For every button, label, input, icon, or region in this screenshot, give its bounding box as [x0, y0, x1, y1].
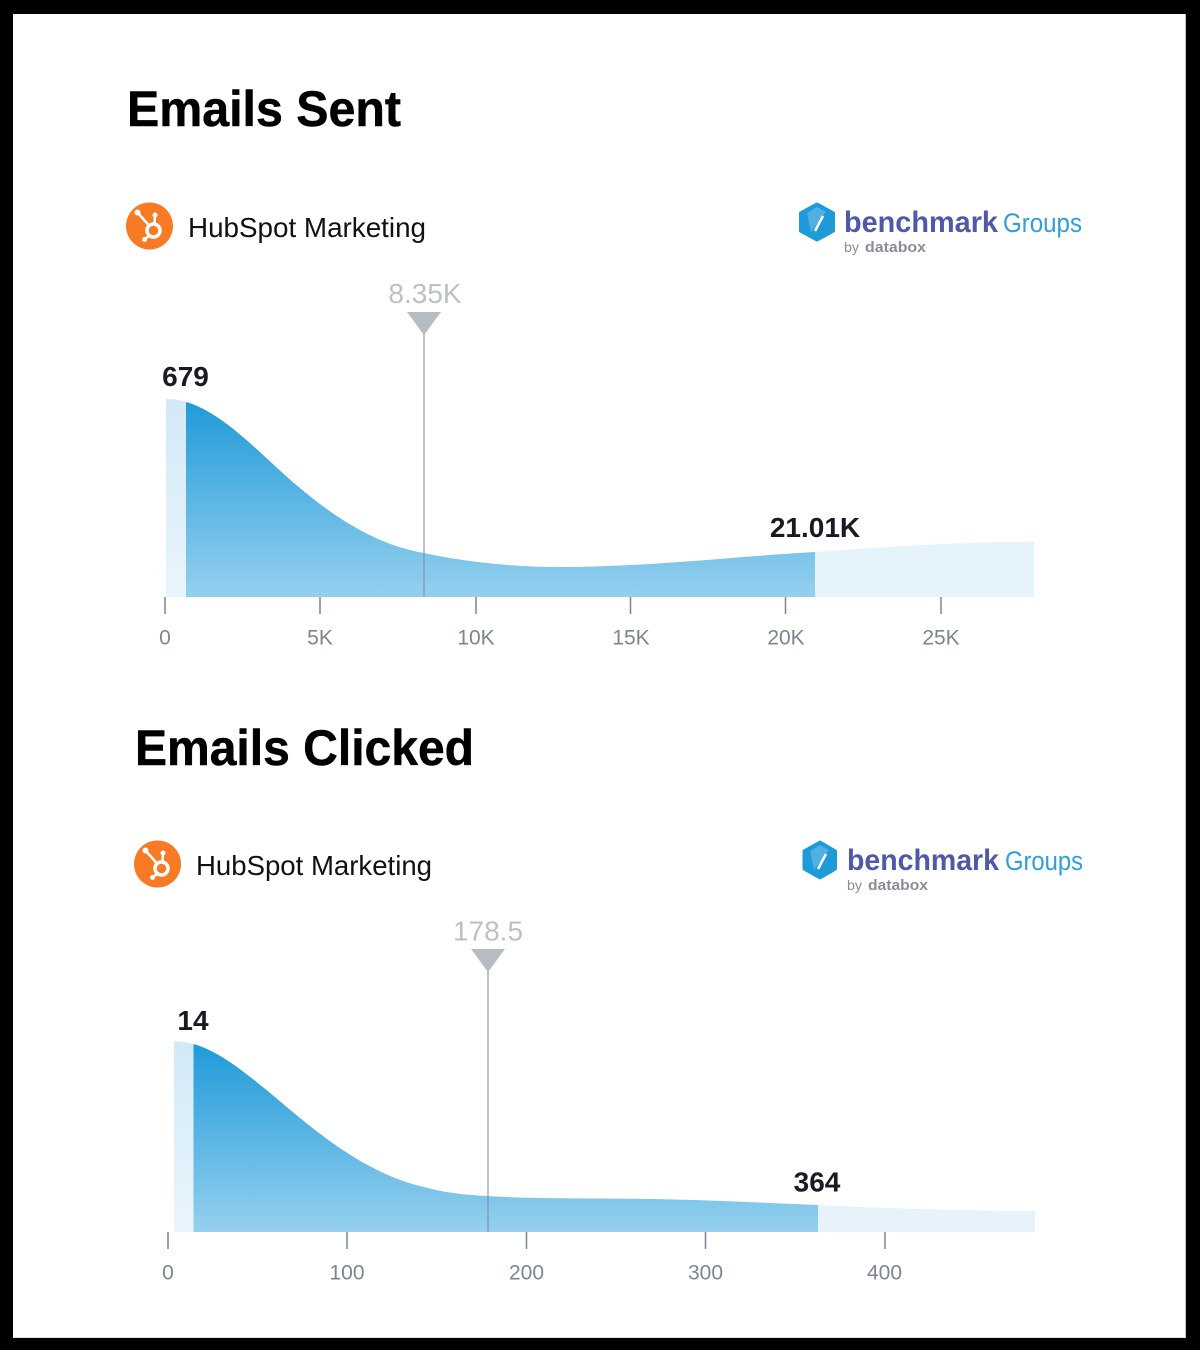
logo: benchmark groups: benchmark: [847, 844, 999, 877]
high outlier band: [815, 542, 1034, 597]
x axis: 10K: [457, 626, 495, 650]
x axis: 0: [162, 1262, 174, 1284]
logo: benchmark groups: [800, 204, 1082, 256]
value label 14: 14: [177, 1005, 209, 1036]
icon: hubspot logo: [134, 840, 181, 888]
median marker: [388, 278, 462, 597]
logo: benchmark groups: databox: [865, 239, 927, 256]
value label 21.01K: 21.01K: [770, 512, 860, 543]
value label 679: 679: [162, 361, 209, 392]
x axis: 15K: [612, 626, 650, 650]
panel: emails sent: [126, 81, 1082, 650]
x axis: 20K: [767, 626, 805, 650]
x axis: 100: [329, 1262, 365, 1284]
logo: benchmark groups: [804, 842, 1083, 894]
median marker: 178.5: [453, 916, 523, 946]
logo: benchmark groups: Groups: [1003, 208, 1082, 238]
median marker: 8.35K: [388, 278, 462, 309]
x axis: [159, 597, 960, 650]
low outlier band: [174, 1042, 194, 1232]
logo: benchmark groups: by: [844, 239, 859, 255]
logo: benchmark groups: benchmark: [844, 206, 998, 239]
label: hubspot marketing: HubSpot Marketing: [188, 212, 426, 243]
density chart: emails sent: [159, 278, 1034, 650]
interquartile area: [194, 1044, 818, 1232]
x axis: 200: [509, 1262, 544, 1284]
x axis: 0: [159, 626, 171, 650]
icon: hubspot logo: [126, 202, 173, 250]
interquartile area: [186, 402, 815, 597]
x axis: 25K: [922, 626, 960, 650]
title: emails sent: Emails Sent: [127, 81, 401, 137]
title: emails clicked: Emails Clicked: [135, 720, 474, 776]
logo: benchmark groups: databox: [868, 877, 929, 894]
label: hubspot marketing: HubSpot Marketing: [196, 850, 432, 881]
value label 364: 364: [794, 1166, 841, 1198]
panel: emails clicked: [134, 720, 1083, 1284]
x axis: 5K: [307, 626, 333, 650]
logo: benchmark groups: by: [847, 877, 862, 893]
logo: benchmark groups: Groups: [1005, 846, 1083, 876]
x axis: 300: [688, 1262, 723, 1284]
x axis: 400: [867, 1262, 902, 1284]
high outlier band: [818, 1205, 1035, 1232]
x axis: [162, 1232, 902, 1284]
median marker: [453, 916, 523, 1232]
low outlier band: [166, 399, 186, 597]
density chart: emails clicked: [162, 916, 1035, 1284]
